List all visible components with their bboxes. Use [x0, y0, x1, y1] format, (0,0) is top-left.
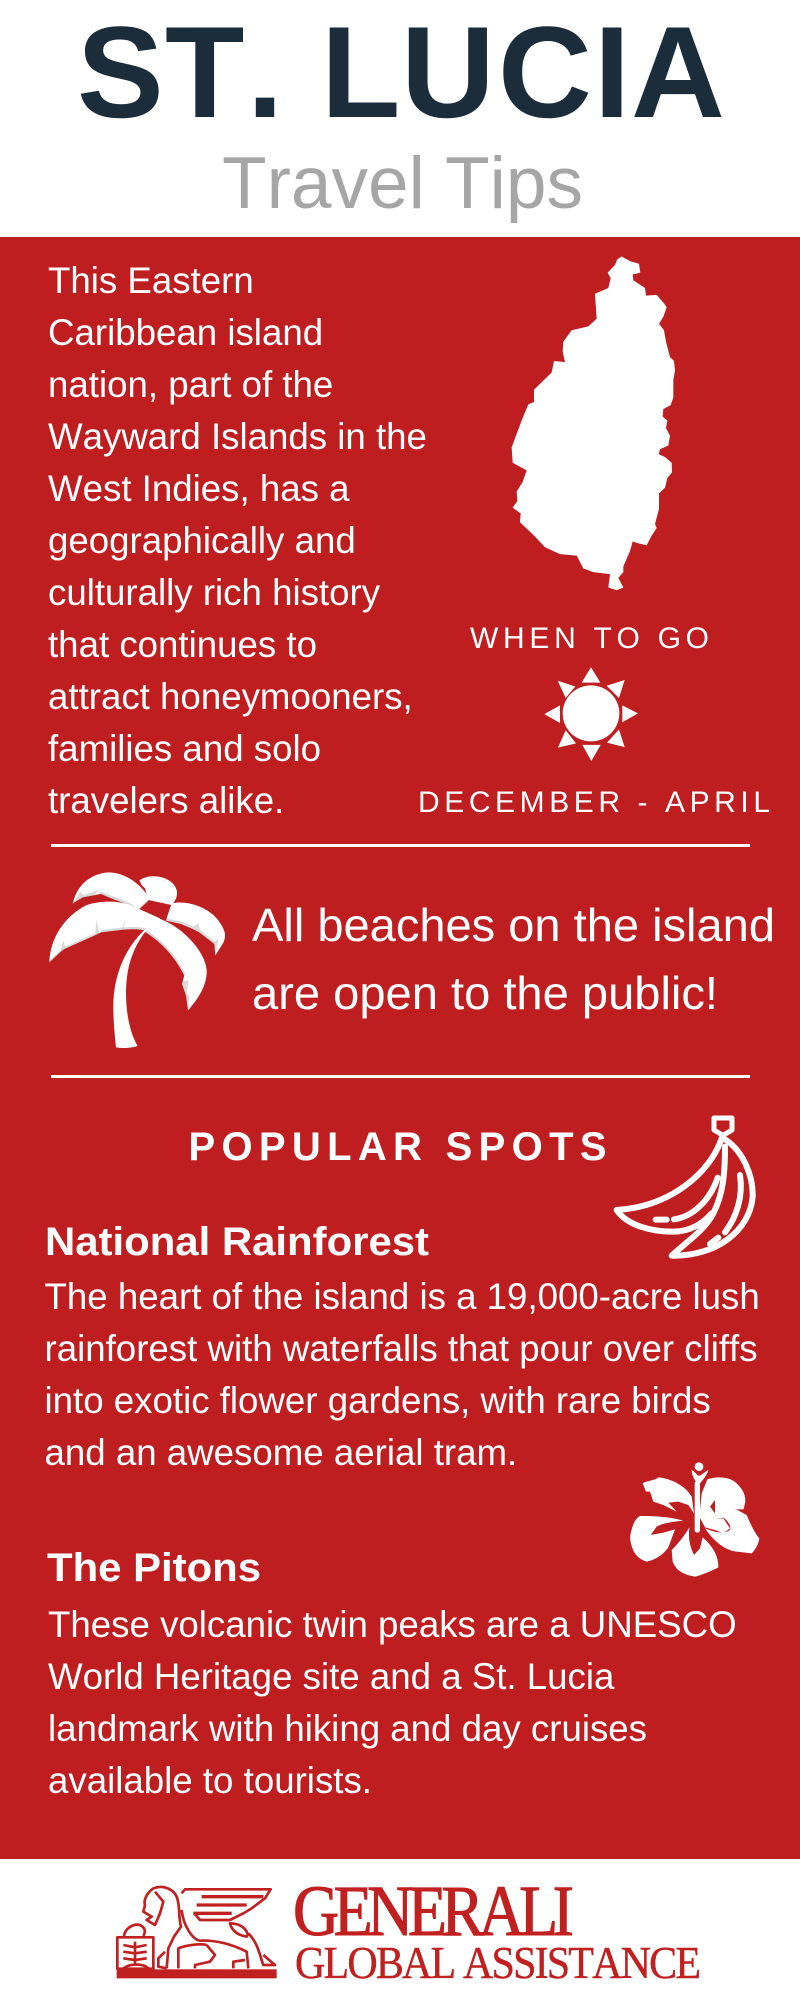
text: Global Assistance: GLOBAL ASSISTANCE [295, 1937, 701, 1988]
heading: popular spots: POPULAR SPOTS [188, 1125, 606, 1169]
icon: St. Lucia island map [512, 257, 675, 590]
divider bottom [51, 1075, 750, 1078]
label: december to april: DECEMBER - APRIL [418, 786, 770, 819]
callout: beaches: All beaches on the island [252, 899, 775, 951]
callout: beaches: are open to the public! [252, 967, 718, 1019]
text block: national rainforest: into exotic flower gardens, with rare birds [44, 1380, 711, 1421]
label: when to go: WHEN TO GO [470, 622, 709, 655]
text block: the pitons: available to tourists. [48, 1760, 372, 1801]
text block: the pitons: These volcanic twin peaks are a UNESCO [48, 1604, 737, 1645]
icon: hibiscus flower [630, 1462, 759, 1577]
heading: the pitons: The Pitons [47, 1546, 261, 1590]
text block: introduction: families and solo [48, 728, 321, 769]
text block: introduction: West Indies, has a [48, 468, 350, 509]
text block: introduction [48, 260, 427, 821]
text block: introduction: attract honeymooners, [48, 676, 413, 717]
divider top [51, 844, 750, 847]
text block: the pitons: World Heritage site and a St. Lucia [48, 1656, 615, 1697]
heading: national rainforest: National Rainforest [45, 1220, 429, 1264]
text: Generali: GENERALI [293, 1871, 574, 1951]
text block: national rainforest: The heart of the island is a 19,000-acre lush [44, 1276, 760, 1317]
callout: beaches [252, 899, 775, 1019]
logo: Generali Global Assistance [117, 1871, 701, 1988]
text block: introduction: Caribbean island [48, 312, 323, 353]
text block: the pitons [48, 1604, 737, 1801]
icon: winged lion [117, 1887, 277, 1978]
text block: the pitons: landmark with hiking and day cruises [48, 1708, 647, 1749]
title: ST. LUCIA [0, 0, 725, 145]
text block: introduction: geographically and [48, 520, 356, 561]
text block: introduction: nation, part of the [48, 364, 333, 405]
icon: palm tree [49, 872, 225, 1048]
subtitle: Travel Tips [222, 141, 583, 224]
text block: introduction: Wayward Islands in the [48, 416, 427, 457]
text block: national rainforest: rainforest with waterfalls that pour over cliffs [44, 1328, 758, 1369]
text block: introduction: culturally rich history [48, 572, 381, 613]
icon: sun [544, 667, 638, 761]
icon: banana [617, 1118, 753, 1256]
text block: national rainforest: and an awesome aerial tram. [44, 1432, 517, 1473]
text block: introduction: that continues to [48, 624, 317, 665]
text block: introduction: travelers alike. [48, 780, 284, 821]
text block: introduction: This Eastern [48, 260, 254, 301]
text block: national rainforest [44, 1276, 760, 1473]
